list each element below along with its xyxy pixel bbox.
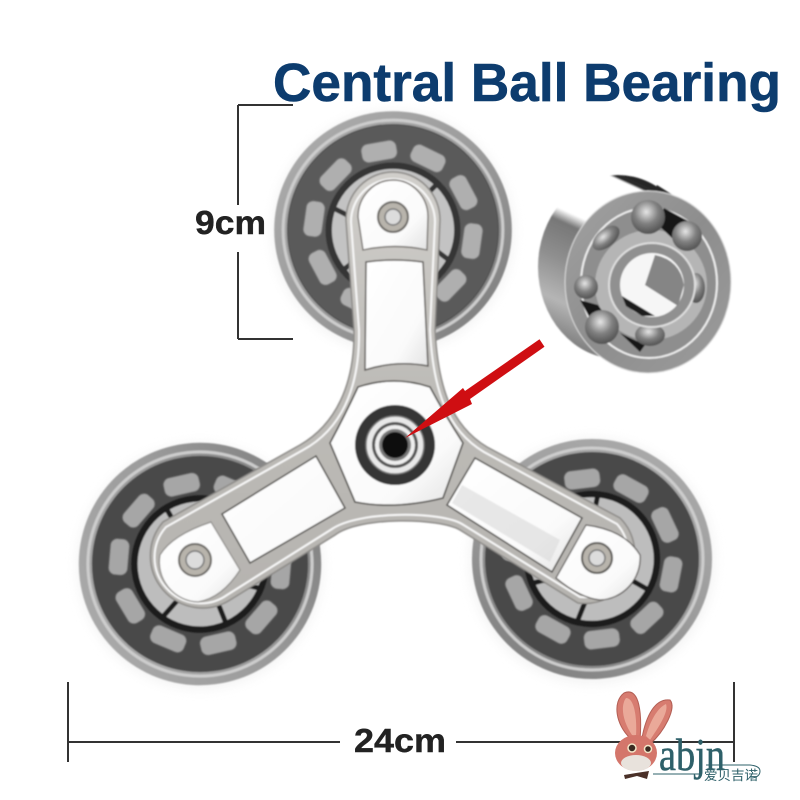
- plate: top cap: [358, 180, 428, 250]
- hub: left: [179, 544, 211, 576]
- balls: [574, 200, 705, 346]
- wheel: top: [274, 111, 512, 349]
- frame outline: [150, 172, 635, 608]
- plate: left arm: [222, 456, 345, 563]
- hub: right: [582, 543, 612, 573]
- brushed shade: right arm: [452, 485, 560, 562]
- wheel: left: [52, 416, 348, 712]
- bore shading: [645, 255, 684, 306]
- highlight rim: [155, 179, 628, 603]
- bearing front ring: [565, 191, 731, 373]
- inner ring: [609, 243, 695, 327]
- central bearing: [355, 405, 435, 485]
- logo: abjn rabbit: [615, 692, 760, 783]
- three-arm silver frame: [150, 172, 640, 608]
- ball bearing illustration: [538, 175, 731, 373]
- logo Chinese name: 爱贝吉诺: [704, 768, 758, 783]
- wheel: right: [445, 412, 739, 706]
- plate: left cap: [159, 522, 240, 602]
- plate: right arm: [447, 458, 582, 572]
- dark gaps: [580, 208, 690, 352]
- logo wordmark: abjn: [659, 729, 725, 780]
- plate: centre: [330, 381, 463, 505]
- bore: [620, 253, 684, 317]
- plate: top arm: [365, 260, 428, 370]
- dimension: height 9cm: [195, 105, 293, 339]
- dimension: width 24cm: [68, 682, 734, 762]
- logo underline and bubble: [653, 765, 760, 778]
- hub: top: [378, 202, 408, 232]
- label: 24cm: 24cm: [354, 722, 446, 759]
- rabbit mascot: [615, 692, 672, 779]
- bearing side: [538, 175, 698, 360]
- red arrow: [405, 339, 544, 438]
- soft background shading: [76, 110, 716, 690]
- label: 9cm: 9cm: [195, 204, 266, 241]
- plate: right cap: [556, 525, 640, 600]
- title: Central Ball Bearing: [273, 53, 781, 113]
